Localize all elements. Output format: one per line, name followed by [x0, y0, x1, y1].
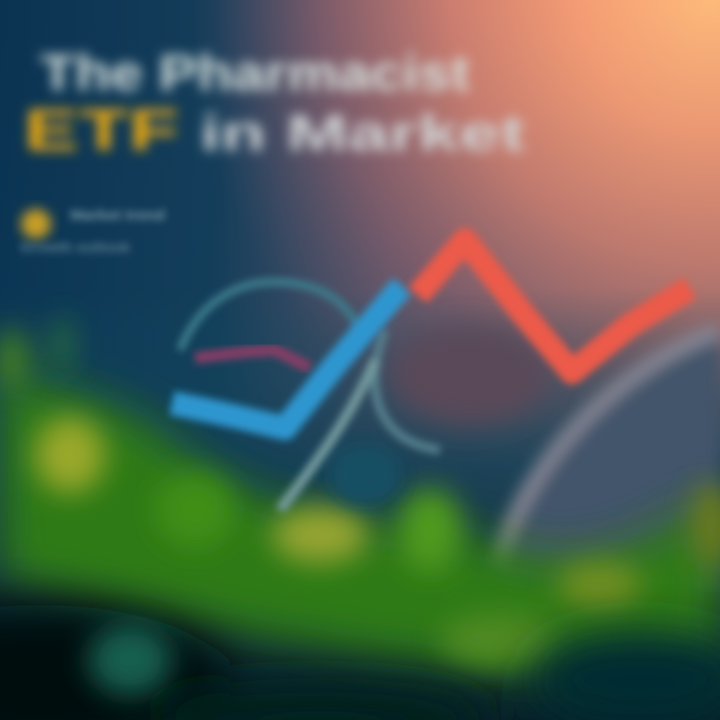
foliage green area [0, 370, 720, 674]
red line [418, 240, 690, 372]
blue line [172, 286, 402, 428]
caption text: Growth outlook [20, 239, 130, 255]
title text [40, 45, 526, 161]
grey curved hill at right [495, 330, 720, 590]
small purple line [195, 350, 310, 368]
title text: in Market [200, 105, 526, 161]
caption text [20, 207, 165, 255]
caption text: Market trend [70, 207, 165, 224]
gold highlight text: ETF [24, 98, 179, 163]
teal pool under chart [329, 445, 401, 505]
foliage highlights [0, 317, 720, 666]
glowing orb bottom left [88, 624, 172, 696]
circle outlines [180, 282, 440, 510]
dark bottom shadow [0, 605, 720, 720]
dark mound behind red line [390, 325, 550, 425]
title text: The Pharmacist [40, 45, 470, 101]
gold bullet icon [21, 209, 51, 239]
